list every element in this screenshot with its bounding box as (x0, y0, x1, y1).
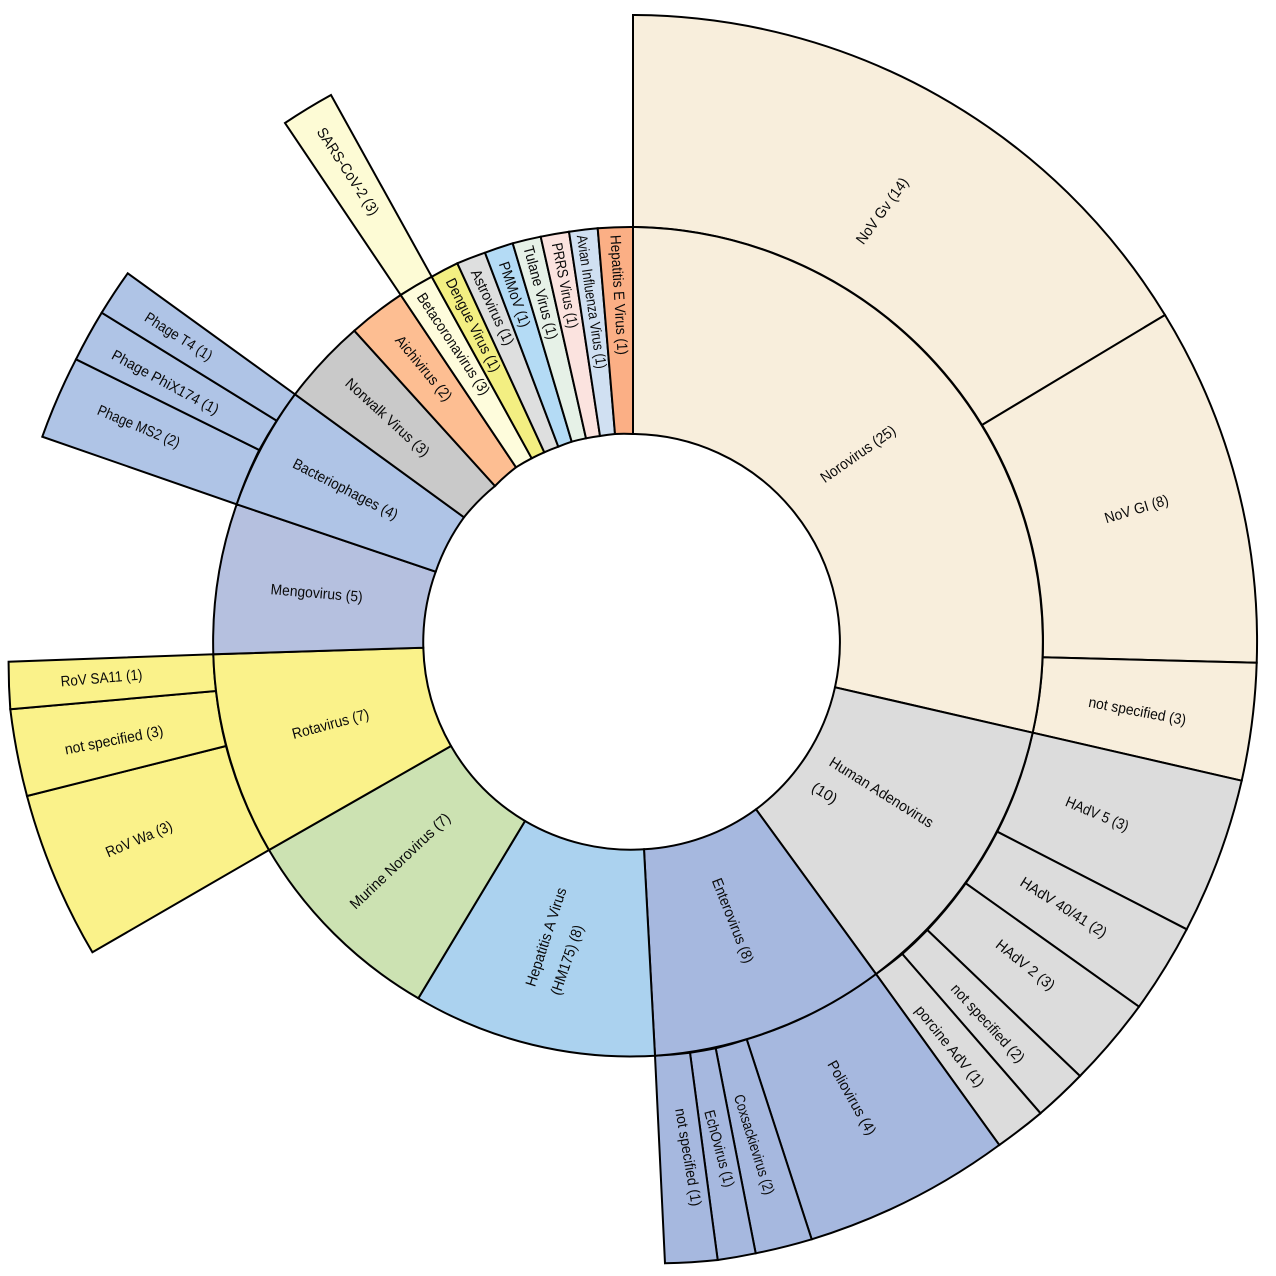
segment: Astrovirus (457, 253, 558, 452)
segment: Phage PhiX174: Phage PhiX174 (1) (109, 347, 222, 419)
segment: RoV SA11: RoV SA11 (1) (60, 666, 143, 691)
segment: Phage PhiX174 (76, 313, 277, 450)
segment: Enterovirus not specified: not specified (1) (671, 1107, 705, 1208)
segment: HAdV 5 (997, 733, 1242, 929)
segment: NoV GI (982, 315, 1257, 663)
segment: Norwalk Virus (295, 331, 495, 517)
segment: porcine AdV: porcine AdV (1) (911, 1002, 988, 1091)
segment: Tulane Virus: Tulane Virus (1) (519, 244, 561, 341)
segment: PMMoV: PMMoV (1) (495, 260, 533, 330)
segment: Human Adenovirus (756, 687, 1033, 974)
segment: Hepatitis E Virus: Hepatitis E Virus (1) (606, 235, 631, 355)
segment: Coxsackievirus (716, 1039, 812, 1253)
segment: Rotavirus not specified: not specified (3) (63, 723, 165, 758)
segment: Enterovirus: Enterovirus (8) (708, 876, 757, 966)
segment: Murine Norovirus (269, 746, 525, 998)
segment: HAdV 40/41: HAdV 40/41 (2) (1017, 874, 1110, 942)
segment: RoV Wa: RoV Wa (3) (103, 818, 175, 861)
segment: HAdV 5: HAdV 5 (3) (1063, 794, 1131, 835)
segment: Astrovirus: Astrovirus (1) (467, 267, 517, 348)
segment: Human Adenovirus: (10) (808, 779, 840, 808)
segment: Mengovirus (213, 504, 436, 654)
segment: PMMoV (485, 243, 572, 447)
segment: porcine AdV (876, 954, 1040, 1145)
segment: Rotavirus: Rotavirus (7) (290, 706, 371, 743)
segment: NoV GI: NoV GI (8) (1103, 492, 1171, 527)
segment: RoV Wa (27, 746, 269, 952)
segment: Phage T4: Phage T4 (1) (141, 309, 215, 365)
segment: NoV Gv (633, 15, 1165, 425)
segment: Phage MS2: Phage MS2 (2) (95, 402, 182, 452)
segment: Phage T4 (102, 273, 295, 421)
segment: Tulane Virus (513, 237, 586, 442)
segment: Poliovirus: Poliovirus (4) (824, 1058, 879, 1138)
segment: Norovirus (633, 227, 1043, 733)
segment: HAdV 2: HAdV 2 (3) (992, 936, 1058, 994)
segment: SARS-CoV-2 (285, 95, 432, 295)
segment: Hepatitis E Virus (598, 227, 633, 434)
segment: HAdV 2 (927, 883, 1139, 1076)
segment: Aichivirus: Aichivirus (2) (391, 332, 455, 405)
segment: Poliovirus (747, 974, 999, 1239)
segment: Dengue Virus (432, 263, 544, 458)
segment: Betacoronavirus (401, 277, 532, 467)
segment: PRRS Virus: PRRS Virus (1) (548, 241, 581, 330)
segment: Norovirus: Norovirus (25) (817, 422, 899, 487)
segment: Aichivirus (354, 295, 516, 486)
segment: Dengue Virus: Dengue Virus (1) (442, 276, 504, 375)
segment: Murine Norovirus: Murine Norovirus (7) (347, 810, 454, 913)
segment: Avian Influenza Virus: Avian Influenza Virus (1) (573, 234, 610, 370)
segment: RoV SA11 (9, 654, 216, 709)
segment: Norwalk Virus: Norwalk Virus (3) (342, 375, 433, 461)
segment: Hepatitis A Virus: Hepatitis A Virus (522, 886, 570, 989)
segment: Mengovirus: Mengovirus (5) (270, 581, 363, 606)
segment: NoV Gv: NoV Gv (14) (853, 175, 912, 248)
segment: EchOvirus (690, 1048, 756, 1260)
segment: HAdV not specified: not specified (2) (947, 981, 1028, 1066)
segment: Rotavirus (213, 648, 451, 850)
segment: Enterovirus (644, 809, 876, 1056)
segment: Bacteriophages (237, 394, 464, 572)
segment: Human Adenovirus: Human Adenovirus (826, 754, 936, 832)
segment: Phage MS2 (42, 359, 259, 504)
segment: HAdV not specified (902, 930, 1080, 1113)
segment: Coxsackievirus: Coxsackievirus (2) (730, 1092, 777, 1197)
segment: SARS-CoV-2: SARS-CoV-2 (3) (313, 125, 382, 219)
segment: Bacteriophages: Bacteriophages (4) (290, 455, 401, 524)
segment: HAdV 40/41 (966, 832, 1187, 1007)
segment: Enterovirus not specified (655, 1053, 718, 1263)
segment: Hepatitis A Virus (418, 821, 655, 1056)
middle ring: virus groups (213, 227, 1043, 1056)
segment: Hepatitis A Virus: (HM175) (8) (548, 923, 587, 997)
segment: Betacoronavirus: Betacoronavirus (3) (413, 290, 493, 398)
segment: PRRS Virus (541, 232, 600, 438)
segment: EchOvirus: EchOvirus (1) (700, 1108, 738, 1189)
segment: Norovirus not specified: not specified (3) (1087, 694, 1188, 729)
segment: Norovirus not specified (1033, 657, 1257, 781)
segment: Rotavirus not specified (10, 691, 226, 796)
